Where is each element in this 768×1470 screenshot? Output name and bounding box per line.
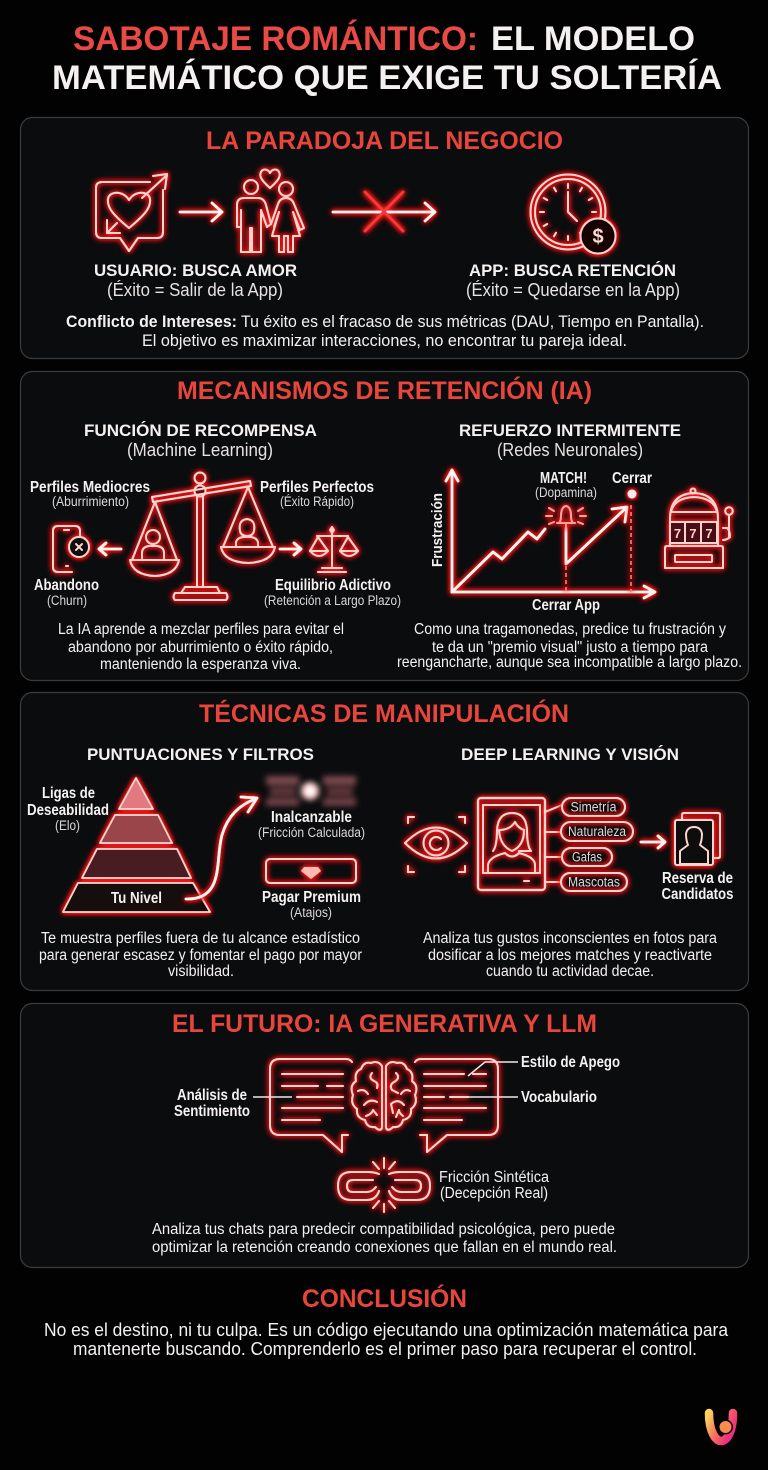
label: match: MATCH! <box>540 470 587 487</box>
text: deep learning explanation: dosificar a los mejores matches y reactivarte <box>428 947 712 964</box>
label: ligas de deseabilidad <box>27 785 109 833</box>
label: usuario: USUARIO: BUSCA AMOR <box>94 261 297 280</box>
arrow: to candidates <box>641 836 665 848</box>
callout lines <box>253 1062 518 1097</box>
text: conclusion: No es el destino, ni tu culpa. Es un código ejecutando una optimización matemática para <box>44 1319 729 1340</box>
labels: abandono: Abandono <box>34 577 99 594</box>
label: usuario: (Éxito = Salir de la App) <box>107 280 283 300</box>
subheading: deep learning: DEEP LEARNING Y VISIÓN <box>461 745 679 764</box>
text: conclusion <box>44 1319 729 1359</box>
icon: left chat bubble <box>270 1059 352 1152</box>
icon: couple <box>237 169 304 252</box>
label: ligas de deseabilidad: Ligas de <box>42 785 95 802</box>
title: EL MODELO <box>491 20 695 58</box>
subheading: refuerzo intermitente: REFUERZO INTERMITENTE <box>459 421 681 440</box>
axis label: frustracion: Frustración <box>430 493 446 567</box>
text: conflicto de intereses <box>66 312 704 350</box>
label: analisis de sentimiento: Sentimiento <box>174 1103 250 1120</box>
labels: equilibrio adictivo <box>264 577 401 608</box>
icon: slot machine <box>665 488 733 568</box>
label: reserva de candidatos: Reserva de <box>662 870 733 887</box>
text: puntuaciones explanation <box>39 930 362 980</box>
blurred profile <box>266 776 356 806</box>
icon: heart message with arrow <box>96 174 167 251</box>
text: refuerzo explanation <box>397 621 742 671</box>
subheading: refuerzo intermitente <box>459 421 681 460</box>
heading: futuro: EL FUTURO: IA GENERATIVA Y LLM <box>172 1010 597 1038</box>
labels: equilibrio adictivo: (Retención a Largo Plazo) <box>264 593 401 608</box>
icon: eye scan <box>405 817 467 872</box>
text: puntuaciones explanation: para generar escasez y fomentar el pago por mayor <box>39 947 362 964</box>
text: deep learning explanation <box>423 930 717 980</box>
icon: candidate cards <box>675 813 720 865</box>
label: pagar premium <box>262 889 361 920</box>
labels: abandono: (Churn) <box>47 593 87 608</box>
text: conflicto de intereses: El objetivo es maximizar interacciones, no encontrar tu pareja ideal. <box>142 331 627 350</box>
label: friccion sintetica: Fricción Sintética <box>439 1169 549 1186</box>
panel: la paradoja del negocio <box>20 118 748 358</box>
text: futuro explanation <box>152 1221 617 1256</box>
labels: equilibrio adictivo: Equilibrio Adictivo <box>275 577 391 594</box>
labels: perfiles perfectos <box>260 479 374 509</box>
pill: gafas <box>562 848 612 866</box>
text: deep learning explanation: Analiza tus gustos inconscientes en fotos para <box>423 930 717 947</box>
arrow: to abandon <box>99 543 121 555</box>
label: app <box>466 261 680 300</box>
icon: large balance scale <box>130 472 275 600</box>
labels: perfiles mediocres: Perfiles Mediocres <box>30 479 150 496</box>
text: futuro explanation: Analiza tus chats para predecir compatibilidad psicológica, pero puede <box>152 1221 615 1238</box>
label: inalcanzable: (Fricción Calculada) <box>258 825 365 840</box>
chart: desirability pyramid <box>63 778 210 912</box>
slot sevens: 7 <box>689 526 697 541</box>
labels: perfiles mediocres <box>30 479 150 509</box>
label: inalcanzable <box>258 809 365 840</box>
axis label: cerrar app: Cerrar App <box>532 597 600 614</box>
text: refuerzo explanation: Como una tragamonedas, predice tu frustración y <box>414 621 726 638</box>
icon: premium button with diamond <box>266 859 356 883</box>
subheading: refuerzo intermitente: (Redes Neuronales) <box>497 440 643 460</box>
label: pagar premium: Pagar Premium <box>262 889 361 906</box>
subheading: funcion de recompensa <box>84 421 317 460</box>
subheading: funcion de recompensa: FUNCIÓN DE RECOMPENSA <box>84 421 317 440</box>
pill: simetria <box>562 798 625 816</box>
label: match <box>535 470 597 500</box>
panel: el futuro <box>20 1004 748 1268</box>
heading: paradoja: LA PARADOJA DEL NEGOCIO <box>206 127 563 155</box>
logo <box>709 1413 733 1441</box>
text: recompensa explanation: abandono por aburrimiento o éxito rápido, <box>68 639 333 656</box>
label: friccion sintetica <box>439 1169 549 1202</box>
heading: mecanismos: MECANISMOS DE RETENCIÓN (IA) <box>177 375 592 405</box>
label: reserva de candidatos <box>662 870 734 903</box>
icon: profile phone <box>478 798 562 890</box>
heading: tecnicas: TÉCNICAS DE MANIPULACIÓN <box>199 698 569 728</box>
icon: broken chain <box>338 1158 430 1212</box>
text: refuerzo explanation: reengancharte, aunque sea incompatible a largo plazo. <box>397 654 742 671</box>
icon: right chat bubble <box>415 1059 498 1152</box>
pill: naturaleza: Naturaleza <box>568 824 626 839</box>
pill: gafas: Gafas <box>572 850 602 864</box>
text: recompensa explanation: La IA aprende a mezclar perfiles para evitar el <box>58 621 344 638</box>
label: usuario <box>94 261 297 300</box>
arrow: crossed out path <box>333 192 435 231</box>
arrow: user to couple <box>180 203 222 221</box>
subheading: funcion de recompensa: (Machine Learning) <box>127 440 273 460</box>
pill: mascotas: Mascotas <box>568 874 620 890</box>
label: tu nivel: Tu Nivel <box>111 890 162 907</box>
label: app: (Éxito = Quedarse en la App) <box>466 280 680 300</box>
label: estilo de apego: Estilo de Apego <box>521 1054 620 1071</box>
title: MATEMÁTICO QUE EXIGE TU SOLTERÍA <box>52 59 722 97</box>
labels: perfiles perfectos: Perfiles Perfectos <box>260 479 374 496</box>
dollar sign: $ <box>592 226 604 248</box>
text: conclusion: mantenerte buscando. Comprenderlo es el primer paso para recuperar el control. <box>73 1338 697 1359</box>
panel: mecanismos de retencion <box>20 372 748 680</box>
slot sevens: 7 <box>674 526 681 541</box>
label: pagar premium: (Atajos) <box>290 905 332 920</box>
subheading: puntuaciones: PUNTUACIONES Y FILTROS <box>87 745 314 764</box>
text: conflicto de intereses: Conflicto de Intereses: Tu éxito es el fracaso de sus métricas (DAU, Tiempo en Pantalla). <box>66 312 704 331</box>
icon: small balance scale <box>310 527 358 572</box>
text: recompensa explanation: manteniendo la esperanza viva. <box>100 656 301 673</box>
arrow: to balance <box>280 543 301 555</box>
label: match: (Dopamina) <box>535 485 597 500</box>
label: vocabulario: Vocabulario <box>521 1089 597 1106</box>
icon: brain <box>352 1062 416 1130</box>
label: analisis de sentimiento: Análisis de <box>177 1087 247 1104</box>
label: app: APP: BUSCA RETENCIÓN <box>469 261 676 280</box>
text: futuro explanation: optimizar la retención creando conexiones que fallan en el mundo real. <box>152 1239 617 1256</box>
panel: tecnicas de manipulacion <box>20 692 748 990</box>
label: friccion sintetica: (Decepción Real) <box>440 1185 548 1202</box>
slot sevens: 7 <box>705 526 713 541</box>
title <box>52 20 722 97</box>
text: puntuaciones explanation: visibilidad. <box>168 963 234 980</box>
label: ligas de deseabilidad: (Elo) <box>55 818 80 833</box>
heading: conclusion: CONCLUSIÓN <box>302 1283 467 1313</box>
text: refuerzo explanation: te da un "premio visual" justo a tiempo para <box>432 639 708 656</box>
text: puntuaciones explanation: Te muestra perfiles fuera de tu alcance estadístico <box>41 930 360 947</box>
label: inalcanzable: Inalcanzable <box>271 809 352 826</box>
labels: perfiles mediocres: (Aburrimiento) <box>52 494 129 509</box>
title: SABOTAJE ROMÁNTICO: <box>73 20 478 58</box>
labels: perfiles perfectos: (Éxito Rápido) <box>280 494 354 509</box>
label: analisis de sentimiento <box>174 1087 250 1120</box>
labels: abandono <box>34 577 99 608</box>
icon: phone abandon <box>53 526 89 572</box>
label: cerrar: Cerrar <box>612 470 652 487</box>
text: recompensa explanation <box>58 621 344 673</box>
pill: simetria: Simetría <box>570 800 617 814</box>
icon: clock with dollar <box>530 174 616 254</box>
label: ligas de deseabilidad: Deseabilidad <box>27 802 109 819</box>
slot sevens <box>674 526 713 541</box>
text: deep learning explanation: cuando tu actividad decae. <box>486 963 654 980</box>
arrow: to unreachable <box>186 797 257 899</box>
label: reserva de candidatos: Candidatos <box>662 886 734 903</box>
icon: alarm bell <box>546 506 586 528</box>
chart: frustration line <box>430 470 655 614</box>
